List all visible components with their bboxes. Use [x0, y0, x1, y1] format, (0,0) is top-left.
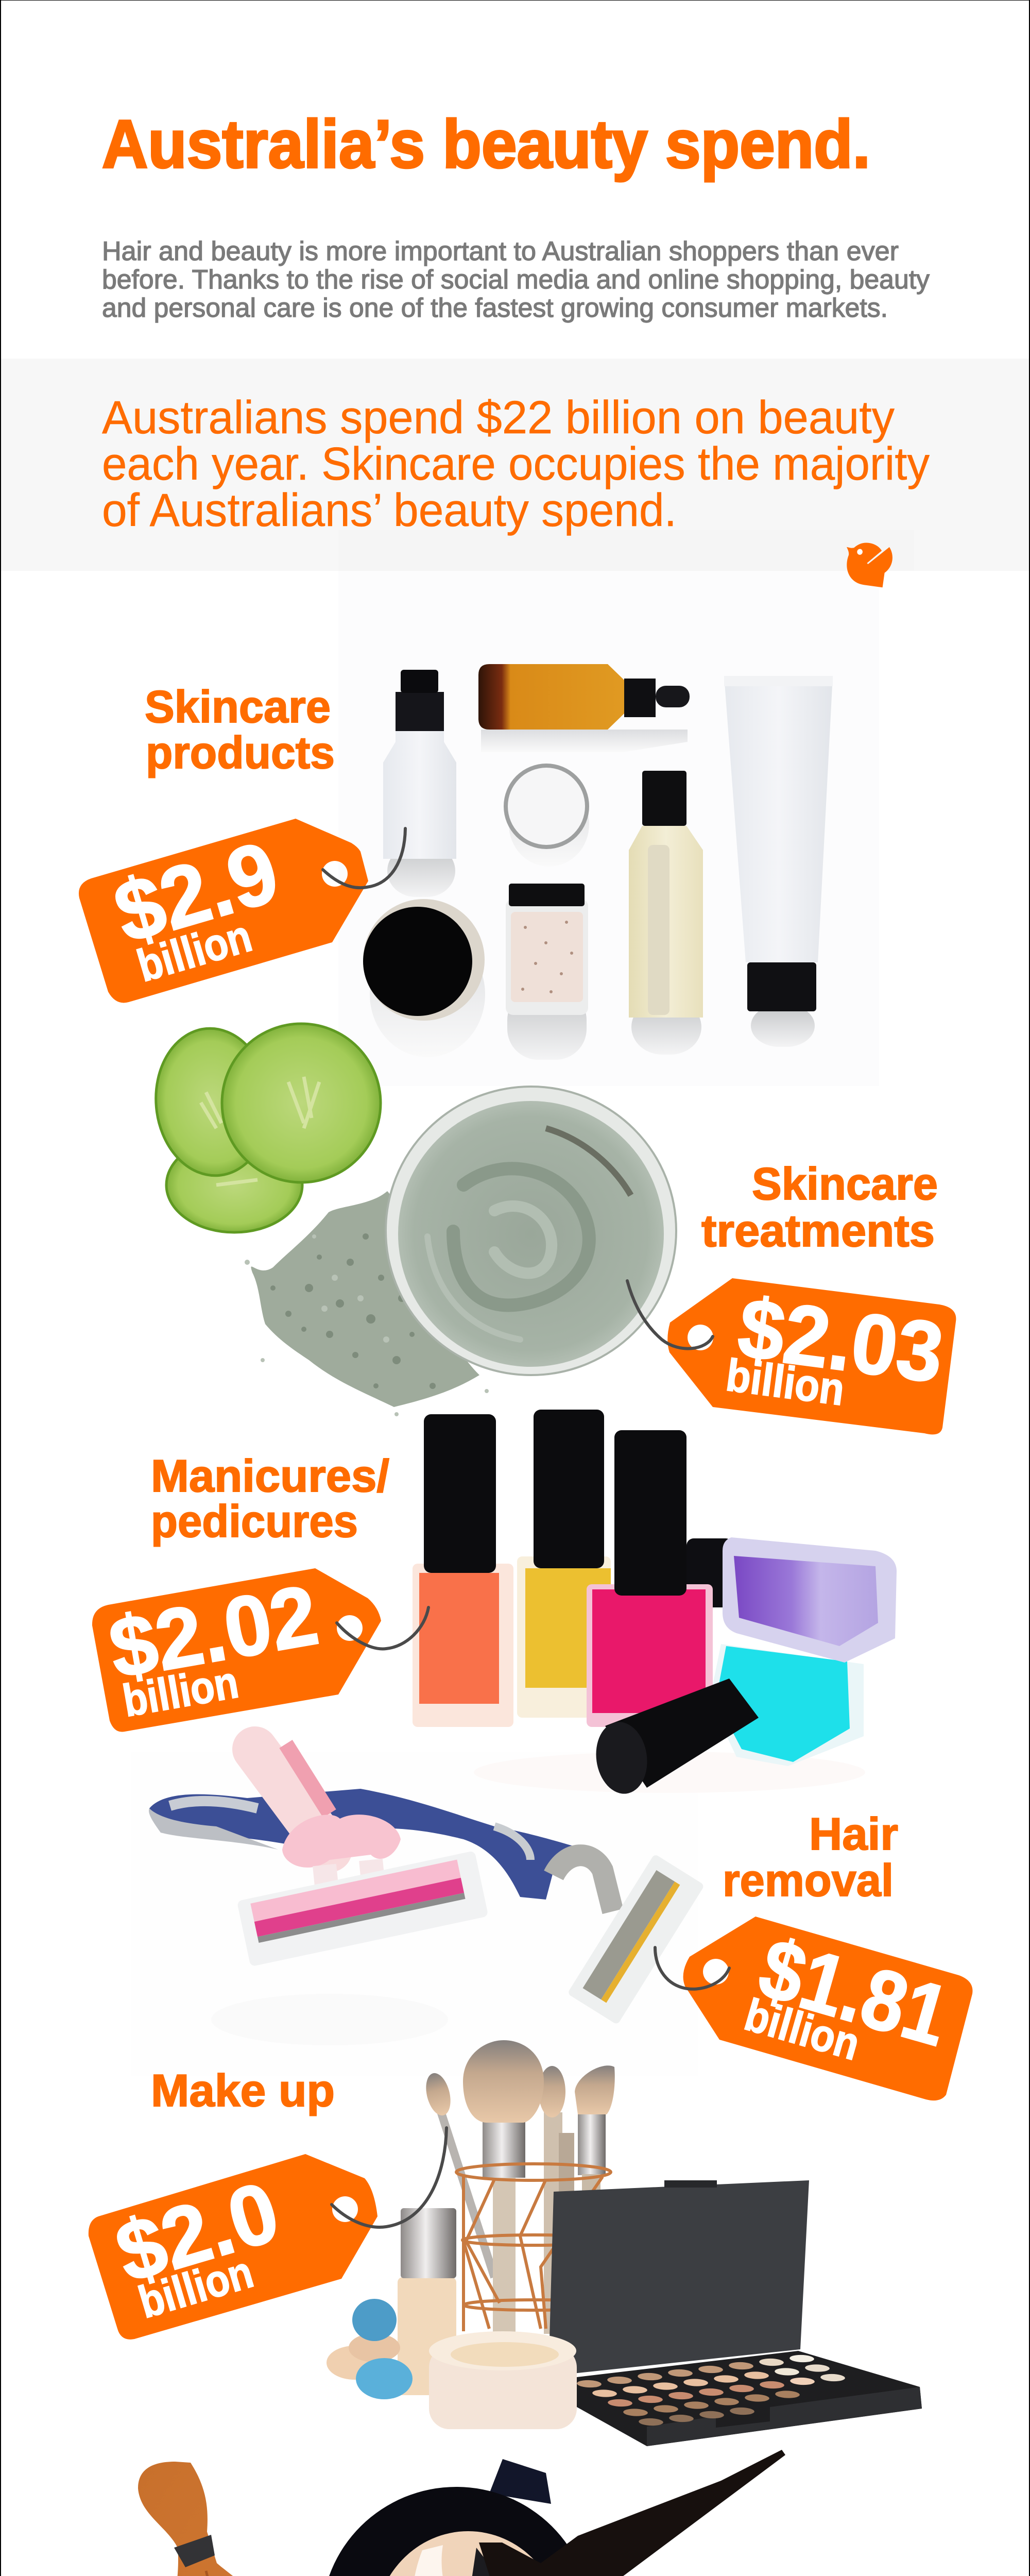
price tag: $2.02 billion — [92, 1567, 428, 1732]
oil bottle — [629, 771, 703, 1055]
intro text block: before. Thanks to the rise of social media and online shopping, beauty — [102, 265, 930, 295]
photo: cucumber slices — [150, 1024, 381, 1232]
pump bottle — [383, 670, 456, 897]
cyan polish — [710, 1644, 864, 1766]
label: skincare treatments: treatments — [701, 1205, 935, 1256]
price tag: $2.03 billion: billion — [724, 1349, 847, 1415]
blue razor — [149, 1789, 613, 1911]
purple polish — [723, 1537, 897, 1663]
price tag: $2.02 billion: billion — [119, 1656, 242, 1726]
photo: clay mask bowl — [386, 1087, 676, 1375]
label: make up: Make up — [151, 2065, 335, 2116]
label: skincare products: Skincare — [145, 681, 331, 732]
round lid — [504, 764, 589, 867]
photo: hair lock — [138, 2462, 507, 2576]
intro text block: Hair and beauty is more important to Australian shoppers than ever — [102, 236, 899, 266]
black lying cap — [592, 1679, 759, 1797]
label: manicures/pedicures — [151, 1450, 389, 1547]
label: skincare products — [145, 681, 335, 778]
price tag: $2.0 billion: $2.0 — [106, 2163, 289, 2301]
panel: skincare treatments — [150, 1024, 956, 1434]
photo: colour bowl and brush — [321, 2450, 785, 2576]
pink polish — [587, 1430, 713, 1727]
black jar — [363, 899, 485, 1057]
label: hair removal — [723, 1808, 898, 1906]
grey razor head — [567, 1854, 705, 2025]
headline statement — [102, 392, 930, 536]
label: hair removal: Hair — [809, 1808, 898, 1859]
label: manicures/pedicures: Manicures/ — [151, 1450, 389, 1501]
label: hair removal: removal — [723, 1855, 894, 1906]
panel: manicures and pedicures — [92, 1410, 897, 1797]
title: Australia’s beauty spend. — [102, 106, 870, 182]
dropper bottle — [478, 664, 690, 752]
tube — [724, 676, 833, 1047]
black cap behind — [686, 1538, 733, 1607]
intro text block: and personal care is one of the fastest growing consumer markets. — [102, 293, 888, 323]
palette lid — [548, 2180, 809, 2376]
price tag: $2.02 billion: $2.02 — [102, 1567, 324, 1696]
foundation bottle — [398, 2208, 456, 2395]
intro text block — [102, 236, 930, 323]
price tag: $2.03 billion: $2.03 — [733, 1280, 949, 1400]
powder jar — [506, 884, 588, 1060]
rose gold holder — [456, 2164, 611, 2331]
photo: clay powder — [245, 1191, 489, 1416]
price tag: $2.9 billion: $2.9 — [104, 823, 288, 962]
palette tray — [573, 2351, 922, 2446]
headline statement: each year. Skincare occupies the majority — [102, 438, 930, 490]
label: skincare treatments: Skincare — [752, 1158, 938, 1209]
brushes — [422, 2040, 615, 2334]
pink razor — [237, 1744, 488, 1967]
powder jar — [429, 2331, 577, 2429]
icon: humm bird — [842, 540, 894, 588]
label: skincare treatments — [701, 1158, 938, 1256]
price tag: $2.9 billion: billion — [132, 910, 257, 991]
headline statement: Australians spend $22 billion on beauty — [102, 392, 895, 444]
price tag: $1.81 billion: $1.81 — [749, 1920, 959, 2064]
price tag: $2.03 billion — [627, 1278, 956, 1434]
price tag: $1.81 billion — [655, 1917, 972, 2100]
photo: razors — [149, 1744, 705, 2045]
label: skincare products: products — [146, 727, 335, 778]
faint photo backdrop — [131, 571, 879, 2076]
yellow polish — [517, 1410, 611, 1718]
orange polish — [413, 1414, 513, 1727]
hair tie — [174, 2535, 215, 2567]
photo: skincare product flat lay — [363, 664, 833, 1060]
photo: makeup set — [327, 2040, 922, 2446]
price tag: $2.9 billion — [79, 819, 405, 1003]
headline statement: of Australians’ beauty spend. — [102, 485, 677, 536]
panel: hair removal — [149, 1744, 972, 2100]
sponges and stand — [327, 2299, 413, 2399]
panel: professional hair colouring — [138, 2450, 934, 2576]
price tag: $2.0 billion — [89, 2128, 447, 2340]
price tag: $1.81 billion: billion — [740, 1989, 865, 2070]
panel: make up — [89, 2040, 922, 2446]
panel: headline band — [1, 359, 1029, 571]
price tag: $2.0 billion: billion — [133, 2246, 259, 2328]
photo: nail polish bottles — [413, 1410, 897, 1797]
label: manicures/pedicures: pedicures — [151, 1496, 358, 1547]
panel: skincare products — [79, 664, 833, 1060]
